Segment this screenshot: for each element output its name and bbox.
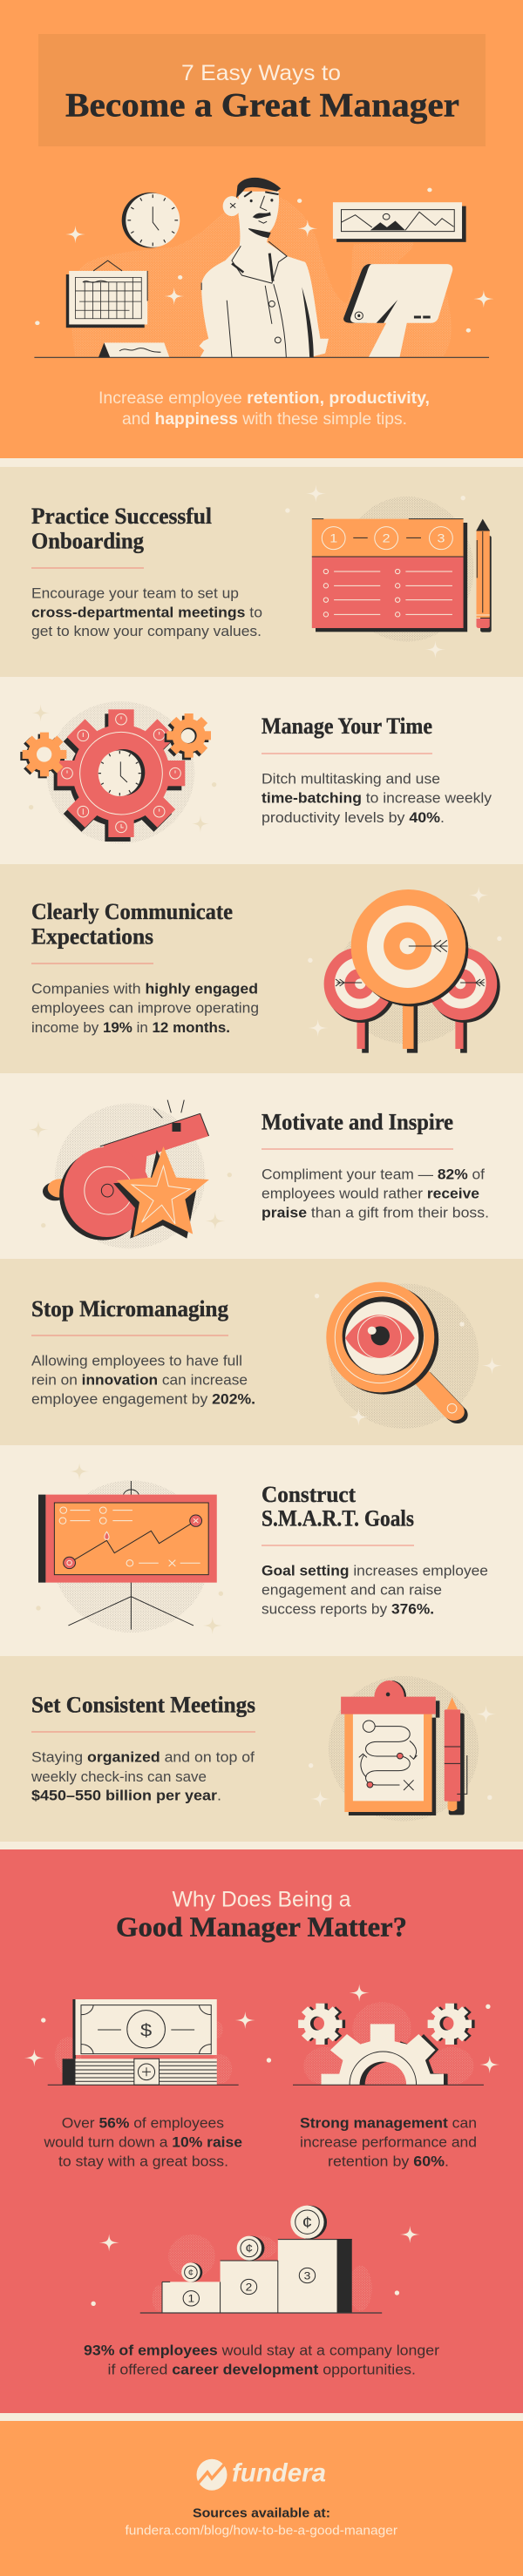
panel: motivate and inspire: [0, 1073, 523, 1259]
body text: employee engagement by 202%.: [31, 1391, 255, 1408]
icon: desk card: [98, 342, 169, 357]
body text: [31, 1749, 255, 1804]
body text: income by 19% in 12 months.: [31, 1019, 230, 1036]
heading: [31, 504, 212, 553]
hero subtitle: [98, 389, 430, 429]
body text: weekly check-ins can save: [31, 1768, 207, 1785]
section title: Why Does Being a: [173, 1887, 351, 1911]
section title: Good Manager Matter?: [116, 1910, 407, 1942]
icon: stack of cash: $: [140, 2020, 152, 2040]
body text: rein on innovation can increase: [31, 1372, 248, 1389]
heading: Set Consistent Meetings: [31, 1693, 255, 1718]
body text: Staying organized and on top of: [31, 1749, 255, 1766]
icon: onboarding checklist and pencil: 3: [437, 532, 445, 545]
panel: clearly communicate expectations: [0, 864, 523, 1073]
icon: coin podium: 3: [304, 2269, 310, 2282]
body text: [262, 770, 492, 826]
body text: Allowing employees to have full: [31, 1352, 242, 1369]
heading: Motivate and Inspire: [262, 1110, 453, 1135]
panel: practice successful onboarding: [0, 467, 523, 677]
heading: [262, 1482, 414, 1531]
stat text: 60 percent: increase performance and: [300, 2134, 477, 2151]
body text: Goal setting increases employee: [262, 1562, 488, 1579]
body text: Compliment your team — 82% of: [262, 1166, 485, 1182]
stat text: 56 percent: Over 56% of employees: [62, 2115, 224, 2132]
sources label: Sources available at:: [193, 2505, 330, 2520]
icon: coin podium: [91, 2206, 420, 2313]
icon: coin podium: 1: [187, 2293, 194, 2304]
title line 2: Become a Great Manager: [65, 87, 459, 124]
icon: clock gears: [20, 701, 216, 843]
icon: wall calendar: [66, 260, 147, 328]
body text: [31, 981, 259, 1036]
heading: Practice Successful: [31, 504, 212, 529]
stat text: 93 percent: [84, 2342, 439, 2378]
body text: employees can improve operating: [31, 1000, 259, 1017]
body text: [262, 1562, 488, 1618]
body text: [262, 1166, 489, 1221]
icon: clipboard and pen: [309, 1676, 496, 1822]
stat text: 56 percent: to stay with a great boss.: [58, 2153, 228, 2170]
floor line: [34, 356, 489, 358]
icon: onboarding checklist and pencil: [285, 485, 492, 659]
panel: hero: [0, 0, 523, 458]
icon: magnifying glass with eye: [315, 1282, 502, 1429]
heading: Onboarding: [31, 528, 144, 553]
stat text: 56 percent: [43, 2115, 242, 2170]
target left: [324, 948, 397, 1023]
heading: Stop Micromanaging: [31, 1296, 228, 1322]
body text: time-batching to increase weekly: [262, 790, 492, 807]
stat text: 93 percent: if offered career development opportunities.: [108, 2362, 416, 2378]
icon: framed picture: [333, 202, 466, 242]
body text: success reports by 376%.: [262, 1601, 434, 1618]
stat text: 60 percent: Strong management can: [300, 2115, 477, 2132]
logo: fundera: [197, 2458, 326, 2491]
heading: Clearly Communicate: [31, 899, 233, 924]
icon: stack of cash: [24, 1999, 271, 2085]
body text: Companies with highly engaged: [31, 981, 258, 997]
icon: tablet: [343, 264, 452, 357]
icon: coin podium: ¢: [302, 2214, 312, 2232]
sources url: fundera.com/blog/how-to-be-a-good-manager: [126, 2523, 397, 2538]
icon: onboarding checklist and pencil: 1: [329, 532, 337, 545]
heading: Expectations: [31, 923, 153, 949]
panel: manage your time: [0, 677, 523, 864]
icon: wall clock: [122, 193, 180, 248]
panel: construct smart goals: [0, 1445, 523, 1656]
panel: why does being a good manager matter: [0, 1849, 523, 2413]
title banner: [38, 34, 486, 146]
body text: praise than a gift from their boss.: [262, 1205, 489, 1221]
body text: get to know your company values.: [31, 623, 262, 639]
halftone backdrop: [71, 197, 452, 356]
icon: presentation board with chart: [36, 1463, 223, 1634]
stat text: 93 percent: 93% of employees would stay at a company longer: [84, 2342, 439, 2358]
heading: Construct: [262, 1482, 356, 1507]
heading: Manage Your Time: [262, 713, 432, 739]
hero subtitle: Increase employee retention, productivity,: [98, 389, 430, 408]
logo: fundera: fundera: [232, 2458, 326, 2487]
sparkles: [35, 188, 493, 333]
icon: three targets: [308, 887, 502, 1053]
stat text: 60 percent: [300, 2115, 477, 2170]
panel: set consistent meetings: [0, 1656, 523, 1842]
section title: [116, 1887, 407, 1942]
body text: $450–550 billion per year .: [31, 1788, 221, 1804]
illustration: manager at desk: [34, 178, 493, 357]
stat text: 56 percent: would turn down a 10% raise: [43, 2134, 242, 2151]
target right: [427, 948, 500, 1023]
body text: Ditch multitasking and use: [262, 770, 440, 787]
title line 1: 7 Easy Ways to: [181, 61, 341, 85]
heading: S.M.A.R.T. Goals: [262, 1506, 414, 1531]
icon: coin podium: ¢: [245, 2242, 253, 2255]
icon: manager figure: [199, 178, 329, 357]
panel: stop micromanaging: [0, 1259, 523, 1445]
stat text: 60 percent: retention by 60%.: [328, 2153, 449, 2170]
body text: [31, 1352, 255, 1408]
heading: [31, 899, 233, 949]
body text: engagement and can raise: [262, 1582, 442, 1599]
icon: gears: [293, 1984, 499, 2085]
icon: coin podium: ¢: [188, 2268, 194, 2278]
icon: onboarding checklist and pencil: 2: [383, 532, 391, 545]
body text: productivity levels by 40%.: [262, 809, 445, 826]
body text: cross-departmental meetings to: [31, 604, 262, 620]
target centre: [351, 889, 468, 1006]
icon: whistle and star: [29, 1100, 232, 1248]
body text: employees would rather receive: [262, 1186, 479, 1202]
hero subtitle: and happiness with these simple tips.: [122, 409, 407, 429]
panel: footer: [0, 2421, 523, 2576]
body text: Encourage your team to set up: [31, 585, 239, 602]
icon: coin podium: 2: [246, 2281, 252, 2293]
body text: [31, 585, 262, 639]
